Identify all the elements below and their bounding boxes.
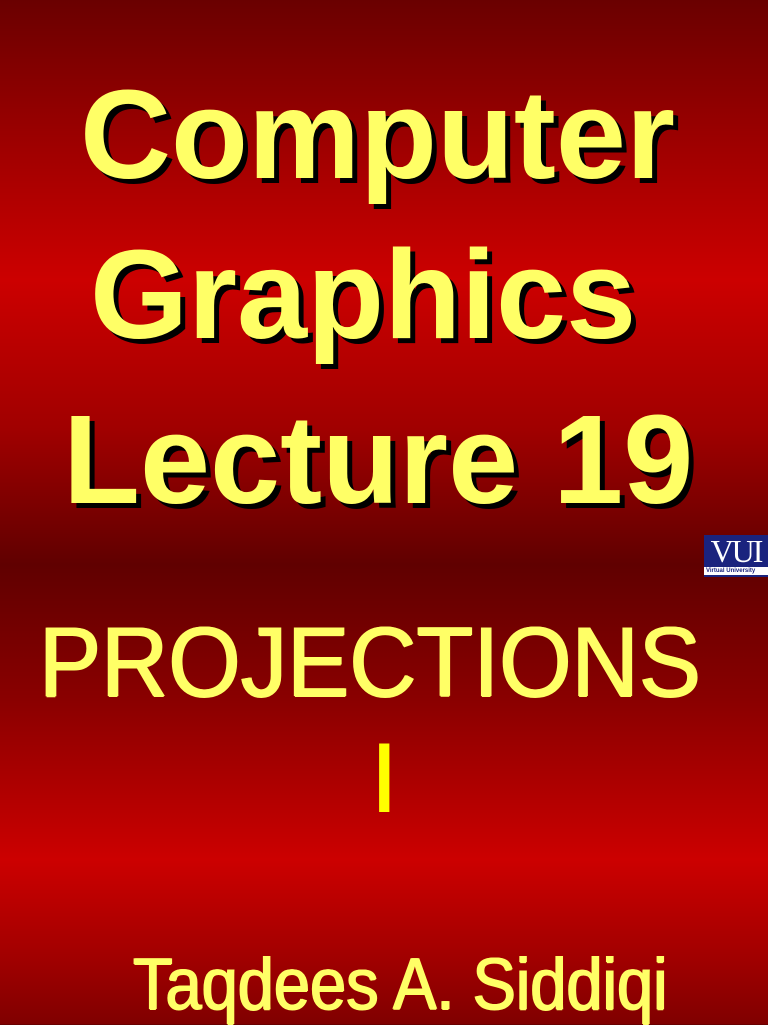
title line 3: Lecture 19 xyxy=(63,389,693,530)
subtitle: PROJECTIONS xyxy=(39,606,701,717)
title line 2: Graphics xyxy=(90,224,636,365)
title line 1: Computer xyxy=(80,64,675,205)
icon: VU logo: VUI xyxy=(711,533,761,569)
part number: I xyxy=(370,722,398,833)
icon: VU logo: Virtual University xyxy=(706,568,755,574)
author: Taqdees A. Siddiqi xyxy=(133,944,668,1025)
icon: VU logo xyxy=(704,535,768,577)
